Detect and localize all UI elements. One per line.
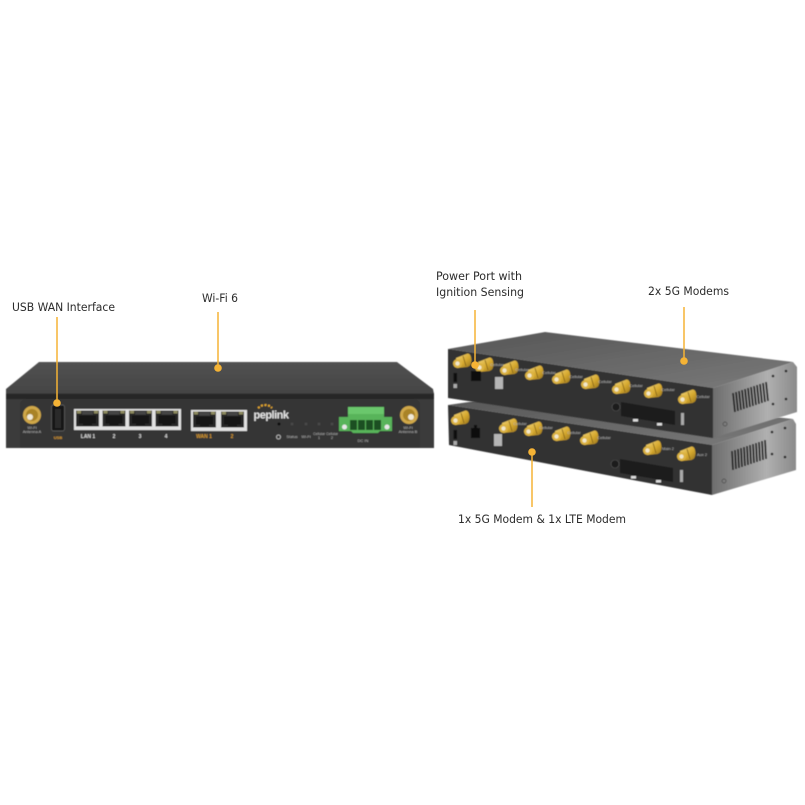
LAN labels [81,434,168,440]
lower side panel [712,419,796,495]
upper SIM slot [612,402,684,426]
callout: 2x 5G Modems: 2x 5G Modems [648,285,729,298]
callout: 2x 5G Modems [648,285,729,365]
upper connector labels: Cellular [542,370,556,375]
lower top plate [448,391,793,445]
WAN labels: 2 [231,434,234,440]
upper connector labels [490,362,710,399]
LED labels: Cellular [326,432,339,436]
callout: 5G and LTE modems [458,448,626,526]
reset and LEDs [276,422,334,439]
antenna A label [23,425,42,434]
upper side panel [713,362,797,438]
lower front face [448,405,712,495]
DC terminal block [339,407,392,433]
antenna A label: Wi-Fi [27,425,37,430]
callout: Power Port [436,270,524,369]
callout: Power Port: Ignition Sensing [436,286,524,299]
upper power port [471,371,481,381]
lower connector labels: Aux 2 [697,452,708,457]
upper vents [733,382,768,412]
peplink logo: peplink [254,410,290,422]
upper connector labels: Cellular [490,362,504,367]
front panel [6,393,434,448]
LED labels: Status [286,434,298,439]
lower connector labels: Cellular [597,435,611,440]
top plate [6,362,434,394]
lower connectors [451,410,696,461]
lower connector labels: Cellular [567,430,581,435]
upper connector labels: Cellular [515,367,529,372]
upper connector labels: Cellular [598,379,612,384]
LED labels: Cellular [313,432,326,436]
antenna B [400,406,418,424]
USB label: USB [54,435,62,440]
lower power port [471,425,480,438]
LED labels [286,432,339,440]
device: lower stacked router [448,391,796,495]
device: front view router [6,362,434,448]
LAN labels: 4 [165,434,168,440]
LAN labels: 3 [139,434,142,440]
lower connector labels: Cellular [539,425,553,430]
device: upper stacked router [448,332,797,438]
LED labels: 2 [331,435,334,440]
callout: Wi-Fi 6 [202,292,238,372]
peplink logo [254,405,290,422]
upper top plate [448,332,793,388]
antenna B label: Wi-Fi [403,425,413,430]
LAN ports [74,409,181,430]
upper connectors [453,354,696,404]
lower screws [722,427,786,483]
WAN labels [196,434,234,440]
WAN labels: WAN 1 [196,434,212,440]
upper small port [454,373,503,389]
antenna A [23,406,41,424]
callout: Power Port: Power Port with [436,270,522,283]
WAN ports [191,410,247,431]
LAN labels: LAN 1 [81,434,95,440]
lower vents [732,440,766,470]
upper connector labels: Cellular [629,383,643,388]
lower connector labels [513,421,708,457]
antenna A label: Antenna A [23,429,42,434]
callout: USB WAN Interface: USB WAN Interface [12,301,115,314]
upper connector labels: Cellular [696,394,710,399]
antenna B label: Antenna B [399,429,418,434]
LED labels: Wi-Fi [301,434,311,439]
upper connector labels: Cellular [569,374,583,379]
upper front face [448,349,713,438]
upper screws [723,370,787,426]
LAN labels: 2 [113,434,116,440]
callout: 5G and LTE modems: 1x 5G Modem & 1x LTE Modem [458,513,626,526]
LED labels: 1 [318,435,321,440]
DC label: DC IN [358,438,369,443]
callout: Wi-Fi 6: Wi-Fi 6 [202,292,238,305]
upper connector labels: Cellular [661,387,675,392]
lower connector labels: Cellular [513,421,527,426]
lower connector labels: Main 2 [662,446,675,451]
lower SIM slot [611,459,683,482]
callout: USB WAN Interface [12,301,115,407]
lower small port [454,430,502,446]
USB port [52,405,64,431]
antenna B label [399,425,418,434]
